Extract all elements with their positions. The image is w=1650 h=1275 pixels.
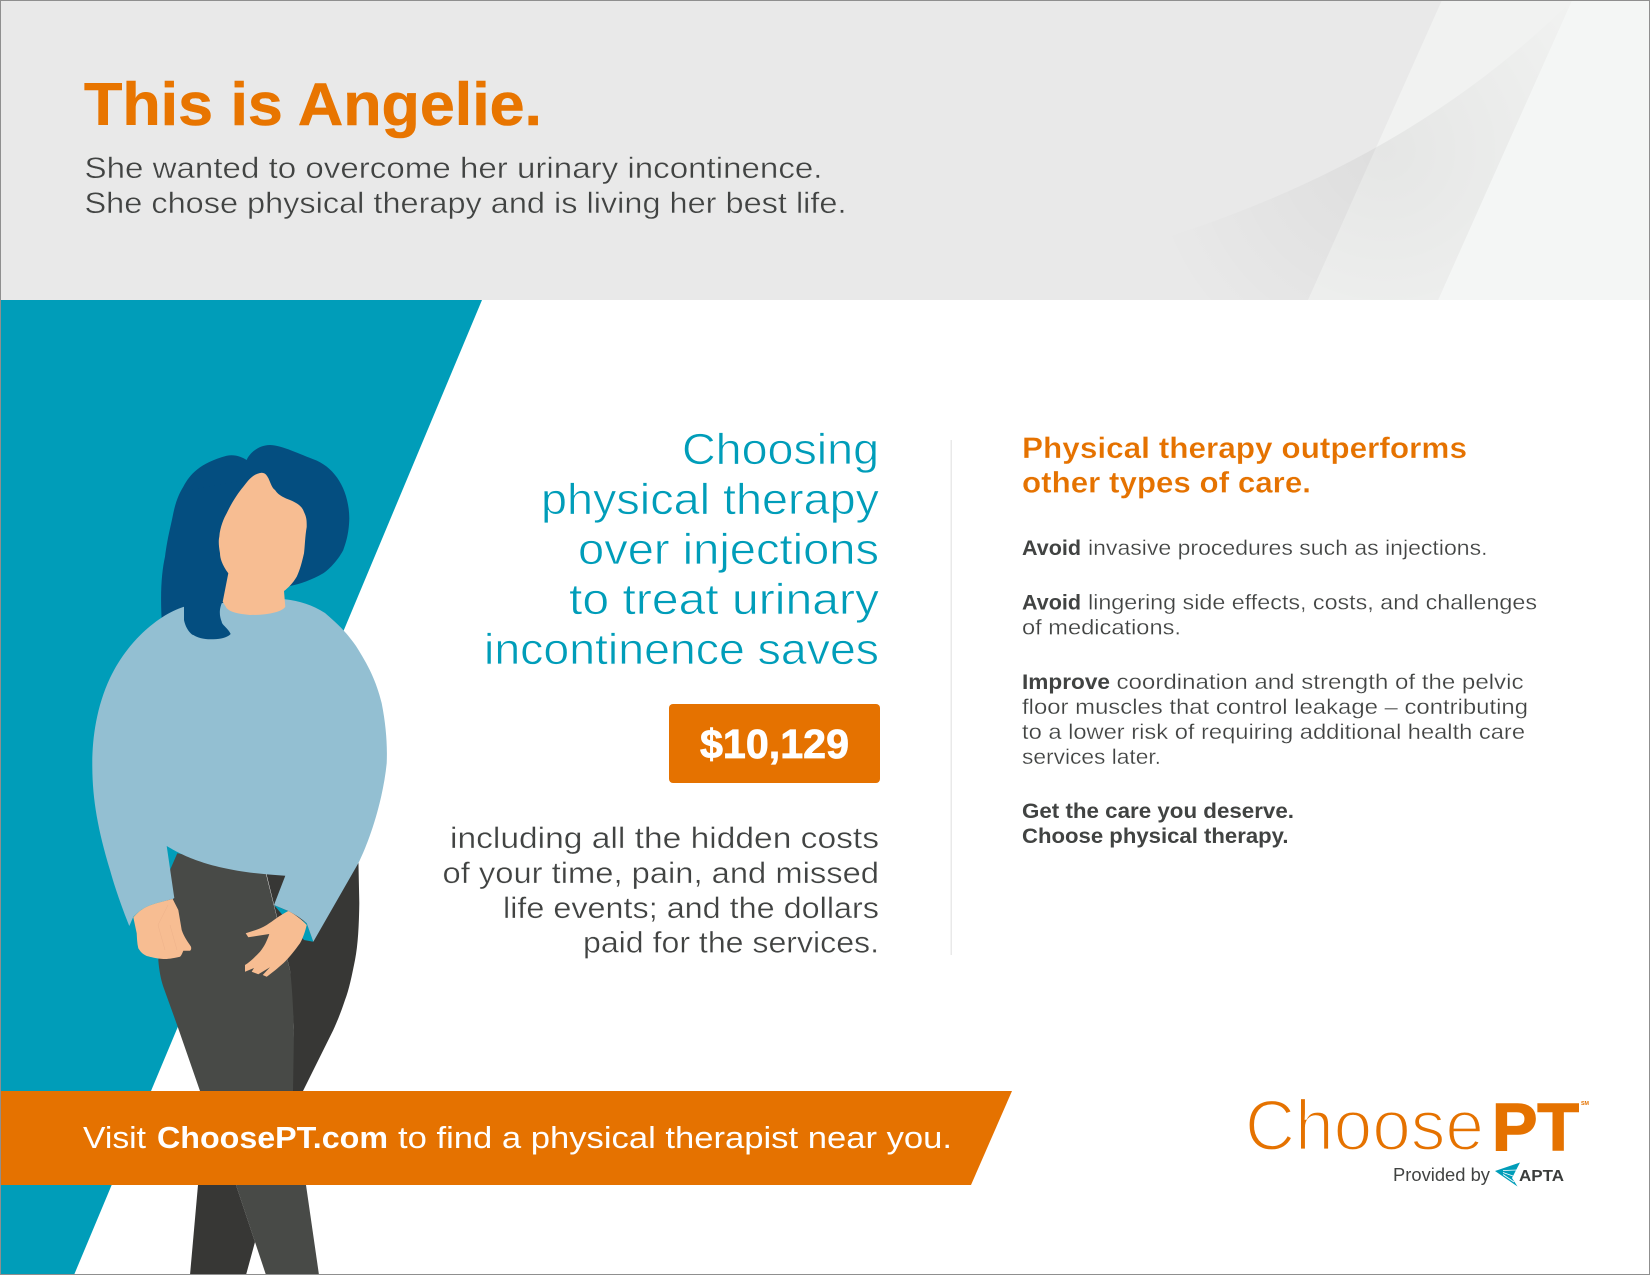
logo: ChoosePT: PT bbox=[1492, 1090, 1579, 1165]
banner: find a physical therapist: Visit bbox=[83, 1120, 146, 1155]
text block: hidden costs: of your time, pain, and missed bbox=[442, 857, 879, 890]
illustration: front trouser leg bbox=[158, 853, 294, 1091]
text block: avoid invasive procedures: Avoid bbox=[1022, 537, 1081, 560]
text block: avoid side effects: Avoid bbox=[1022, 592, 1081, 614]
logo: ChoosePT: APTA bbox=[1519, 1168, 1564, 1185]
text block: avoid invasive procedures: invasive procedures such as injections. bbox=[1088, 537, 1488, 560]
heading: choosing physical therapy: over injections bbox=[578, 525, 879, 574]
illustration: left hand bbox=[133, 899, 191, 959]
text block: improve coordination bbox=[1022, 671, 1528, 769]
text block: avoid side effects bbox=[1022, 592, 1537, 640]
banner: find a physical therapist bbox=[0, 1091, 1012, 1185]
text block: hidden costs: life events; and the dollars bbox=[503, 892, 879, 925]
logo: ChoosePT: Provided by bbox=[1393, 1165, 1490, 1185]
subtitle text block bbox=[84, 152, 847, 220]
text block: avoid side effects: of medications. bbox=[1022, 616, 1181, 640]
illustration: woman bbox=[92, 445, 387, 1275]
illustration: sleeve lining bbox=[274, 905, 313, 942]
text block: call to care: Get the care you deserve. bbox=[1022, 800, 1294, 823]
text block: call to care: Choose physical therapy. bbox=[1022, 825, 1288, 848]
logo: ChoosePT: Choose bbox=[1245, 1087, 1484, 1166]
illustration: sweater bbox=[92, 599, 387, 942]
panel: teal diagonal background bbox=[0, 300, 482, 1275]
logo: ChoosePT: SM bbox=[1581, 1101, 1589, 1107]
text block: call to care bbox=[1022, 800, 1294, 848]
heading: choosing physical therapy bbox=[484, 425, 879, 674]
banner: find a physical therapist: ChoosePT.com bbox=[157, 1120, 388, 1155]
heading: choosing physical therapy: to treat urinary bbox=[569, 575, 879, 624]
text block: hidden costs: including all the hidden costs bbox=[450, 822, 879, 855]
banner: find a physical therapist: to find a physical therapist near you. bbox=[398, 1120, 952, 1155]
heading: choosing physical therapy: physical therapy bbox=[541, 475, 879, 524]
illustration: hair back bbox=[161, 445, 349, 620]
illustration: hair lock bbox=[170, 480, 245, 639]
text block: improve coordination: services later. bbox=[1022, 746, 1161, 769]
text block: improve coordination: floor muscles that control leakage – contributing bbox=[1022, 696, 1528, 719]
icon: APTA wing bbox=[1495, 1162, 1520, 1186]
logo: ChoosePT bbox=[1245, 1087, 1589, 1186]
text block: hidden costs: paid for the services. bbox=[583, 926, 879, 960]
title: This is Angelie. bbox=[84, 71, 542, 138]
heading: physical therapy outperforms: Physical therapy outperforms bbox=[1022, 432, 1467, 465]
heading: choosing physical therapy: incontinence saves bbox=[484, 625, 879, 674]
illustration: face and neck bbox=[219, 473, 307, 615]
subtitle text block: She wanted to overcome her urinary incontinence. bbox=[84, 152, 822, 185]
illustration: back trouser leg bbox=[265, 855, 359, 1091]
heading: physical therapy outperforms: other types of care. bbox=[1022, 466, 1311, 500]
text block: improve coordination: to a lower risk of requiring additional health care bbox=[1022, 721, 1525, 744]
subtitle text block: She chose physical therapy and is living her best life. bbox=[84, 187, 847, 220]
text block: improve coordination: Improve bbox=[1022, 671, 1110, 694]
text block: improve coordination: coordination and strength of the pelvic bbox=[1116, 671, 1524, 694]
heading: physical therapy outperforms bbox=[1022, 432, 1467, 500]
text block: hidden costs bbox=[442, 822, 879, 960]
panel: header band bbox=[0, 0, 1650, 300]
callout: savings amount: $10,129 bbox=[700, 721, 849, 767]
heading: choosing physical therapy: Choosing bbox=[682, 425, 879, 474]
callout: savings amount bbox=[669, 704, 880, 783]
illustration: right hand bbox=[245, 911, 307, 977]
text block: avoid side effects: lingering side effects, costs, and challenges bbox=[1088, 592, 1537, 614]
